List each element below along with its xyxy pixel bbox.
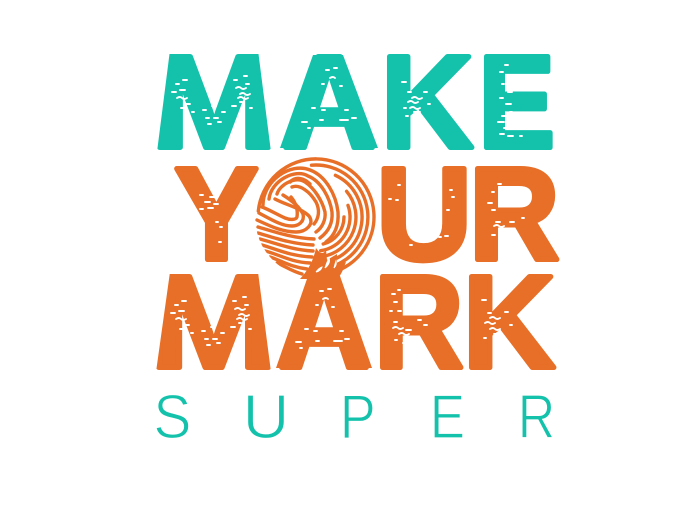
subheading: SUPER: S <box>153 382 191 452</box>
heading line: MAKE: A <box>283 28 376 176</box>
subheading: SUPER: E <box>430 383 465 452</box>
heading line: MAKE <box>150 28 555 176</box>
heading line: YOUR (fingerprint replaces the O): U <box>376 141 472 288</box>
heading line: MARK <box>149 248 555 396</box>
logo <box>156 54 560 438</box>
heading line: MAKE: E <box>479 29 555 176</box>
heading line: MARK: R <box>374 249 464 396</box>
lower-left ridges <box>258 227 314 274</box>
heading line: MAKE: K <box>381 29 473 176</box>
fingerprint icon <box>257 159 374 279</box>
subheading: SUPER: U <box>242 381 289 452</box>
heading line: MAKE: M <box>150 29 278 176</box>
heading line: YOUR (fingerprint replaces the O): Y <box>174 141 258 288</box>
left lobe ridges <box>257 195 311 232</box>
outer ridges <box>258 159 374 274</box>
core loop ridges <box>263 168 338 242</box>
subheading: SUPER: R <box>518 383 555 452</box>
heading line: MARK: M <box>149 248 278 396</box>
heading line: YOUR (fingerprint replaces the O): R <box>469 141 560 288</box>
subheading: SUPER <box>153 381 555 452</box>
heading line: MARK: K <box>463 249 555 396</box>
subheading: SUPER: P <box>340 382 376 452</box>
heading line: MARK: A <box>278 249 370 396</box>
fingerprint trunk <box>300 248 346 279</box>
heading line: YOUR (fingerprint replaces the O) <box>174 141 560 288</box>
